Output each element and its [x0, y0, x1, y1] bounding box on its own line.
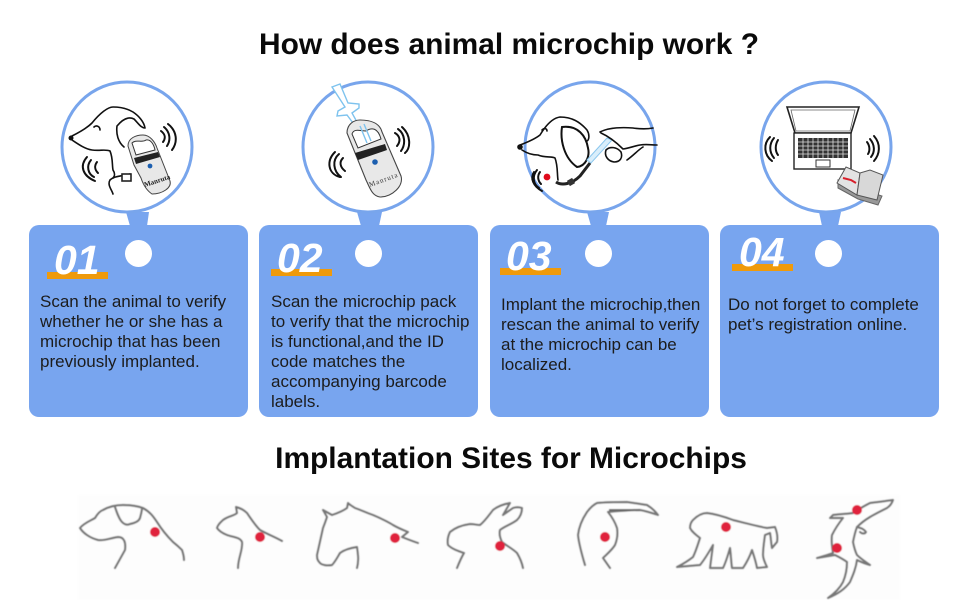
dot: step 3	[585, 240, 612, 267]
underline	[732, 264, 793, 271]
dot: step 1	[125, 240, 152, 267]
circle: step 4 illustration frame	[761, 82, 891, 212]
pointer: step 3	[587, 212, 609, 226]
strip background	[78, 495, 900, 600]
panel: step 1 card	[29, 225, 248, 417]
step number 01: 01	[54, 237, 100, 283]
circle: step 2 illustration frame	[303, 82, 433, 212]
text: step 2: Scan the microchip pack	[271, 292, 457, 311]
underline	[271, 269, 332, 276]
animal: horse	[317, 503, 418, 568]
text: step 4: Do not forget to complete	[728, 295, 919, 314]
title: How does animal microchip work ?	[259, 28, 759, 61]
text: step 1: previously implanted.	[40, 352, 200, 371]
pointer: step 2	[357, 212, 382, 226]
icon: dog with scanner	[68, 107, 176, 194]
text: step 2: accompanying barcode	[271, 372, 447, 391]
pointer: step 1	[126, 212, 149, 226]
step number 02: 02	[277, 235, 323, 281]
dot: step 2	[355, 240, 382, 267]
dot: step 4	[815, 240, 842, 267]
animal: bird	[578, 502, 658, 568]
icon: scanner with syringe	[329, 84, 409, 197]
heading: implantation sites: Implantation Sites for Microchips	[275, 442, 747, 475]
icon: dog and hand implanting	[517, 117, 657, 191]
icon: laptop and book	[765, 107, 883, 205]
animal: cat	[217, 507, 282, 568]
text: step 3: localized.	[501, 355, 572, 374]
step 4	[720, 82, 939, 417]
animal: rabbit	[448, 503, 523, 568]
underline	[500, 268, 561, 275]
text: step 3: at the microchip can be	[501, 335, 677, 354]
panel: step 3 card	[490, 225, 709, 417]
panel: step 4 card	[720, 225, 939, 417]
circle: step 1 illustration frame	[62, 82, 192, 212]
step number 04: 04	[739, 229, 785, 275]
text: step 2: code matches the	[271, 352, 405, 371]
circle: step 3 illustration frame	[525, 82, 655, 212]
text: step 2: labels.	[271, 392, 320, 411]
step 1	[29, 82, 248, 417]
text: step 2: is functional,and the ID	[271, 332, 444, 351]
text: step 2: to verify that the microchip	[271, 312, 469, 331]
text: step 1: Scan the animal to verify	[40, 292, 227, 311]
text: step 4: pet’s registration online.	[728, 315, 907, 334]
panel: step 2 card	[259, 225, 478, 417]
step 2	[259, 82, 478, 417]
icon: scanner with syringe: Manruta	[368, 171, 400, 189]
underline	[47, 272, 108, 279]
implantation strip	[78, 495, 900, 600]
animal: dog	[80, 505, 184, 568]
text: step 1: microchip that has been	[40, 332, 220, 351]
animal: lizard	[817, 500, 893, 598]
step number 03: 03	[506, 233, 552, 279]
text: step 1: whether he or she has a	[39, 312, 223, 331]
text: step 3: Implant the microchip,then	[501, 295, 700, 314]
icon: dog with scanner: Manruta	[143, 173, 172, 189]
text: step 3: rescan the animal to verify	[501, 315, 700, 334]
pointer: step 4	[819, 212, 841, 226]
animal: monkey	[677, 513, 777, 568]
step 3	[490, 82, 709, 417]
